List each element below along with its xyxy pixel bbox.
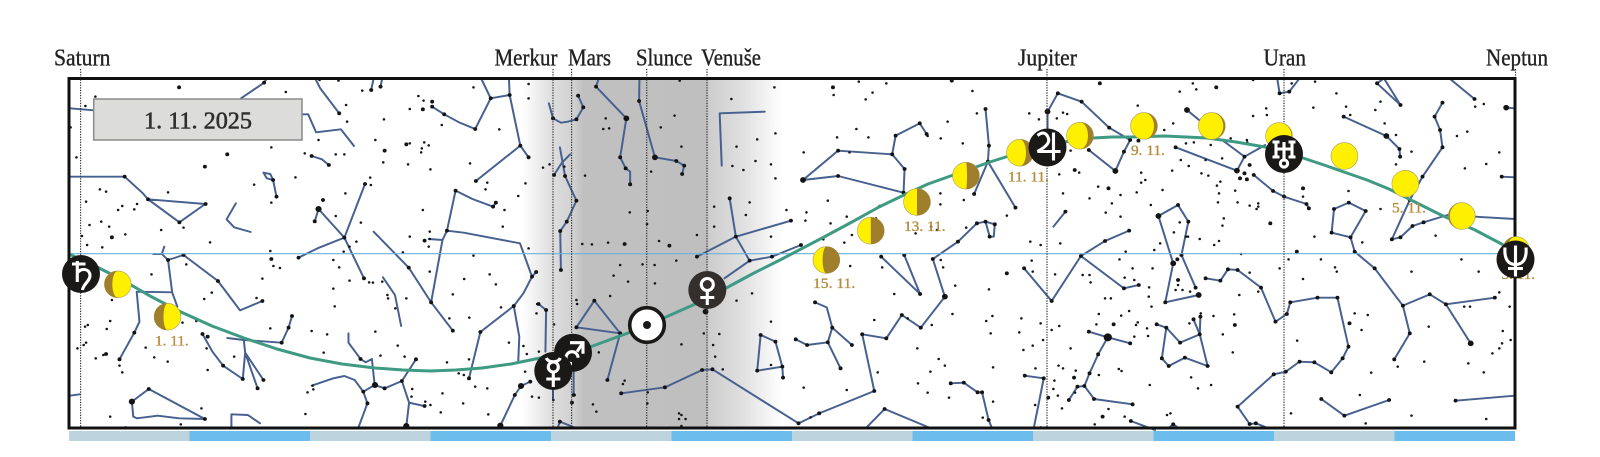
constellations: central section — [539, 78, 1015, 428]
moon date labels: 1. 11. — [155, 334, 189, 350]
stars: central small — [543, 81, 1007, 428]
planet: Jupiter — [1028, 128, 1066, 166]
moon: 2 Nov — [104, 271, 131, 298]
moon: 11 Nov — [1007, 139, 1033, 166]
planet name labels: Merkur — [494, 46, 558, 72]
planet name labels: Slunce — [636, 46, 692, 72]
stars: east medium — [1024, 83, 1506, 424]
stars: east small — [1019, 80, 1511, 427]
moon: 15 Nov — [813, 247, 840, 273]
moon date labels: 9. 11. — [1131, 143, 1165, 159]
planet: Saturn — [62, 255, 100, 293]
moon phases along ecliptic — [104, 113, 1529, 330]
moon: 9 Nov — [1131, 113, 1157, 139]
chart frame — [69, 78, 1515, 428]
moon: 7 Nov — [1266, 123, 1292, 149]
moon: 1 Nov — [154, 303, 181, 330]
planet position dotted guides — [81, 69, 1516, 428]
moon: 10 Nov — [1067, 122, 1093, 149]
moon date labels: 11. 11. — [1008, 170, 1049, 186]
moon date labels: 3. 11. — [1502, 267, 1535, 283]
planet name labels: Neptun — [1486, 46, 1548, 72]
planet name labels: Uran — [1264, 46, 1306, 72]
planet name labels — [54, 46, 1548, 72]
moon: 4 Nov — [1448, 203, 1475, 229]
star field and constellations — [70, 78, 1515, 430]
constellations: east section — [1019, 78, 1515, 430]
stars: east large — [1048, 108, 1506, 343]
moon: 6 Nov — [1331, 143, 1358, 169]
stars: west small — [71, 80, 539, 427]
moon date labels — [155, 143, 1535, 350]
moon: 12 Nov — [953, 162, 979, 189]
planet: Uranus — [1265, 135, 1303, 173]
planet name labels: Saturn — [54, 46, 110, 72]
moon date labels: 13. 11. — [904, 219, 946, 235]
stars: central large — [626, 118, 945, 312]
moon: 8 Nov — [1198, 113, 1225, 139]
stars: west large — [132, 209, 521, 426]
planet: Mercury — [534, 352, 572, 390]
bottom month strip — [69, 431, 1515, 441]
moon: 13 Nov — [904, 189, 930, 215]
constellations: west section — [70, 78, 539, 428]
moon: 3 Nov — [1503, 237, 1529, 263]
moon: 5 Nov — [1392, 170, 1419, 197]
date box — [94, 99, 302, 140]
moon date labels: 15. 11. — [813, 276, 855, 292]
stars: west medium — [106, 83, 536, 419]
ecliptic curve — [69, 136, 1513, 371]
moon: 14 Nov — [857, 217, 884, 244]
planet: Venus — [688, 271, 726, 309]
planet name labels: Venuše — [701, 46, 761, 72]
planet: Neptune — [1496, 240, 1534, 278]
planet name labels: Mars — [568, 46, 611, 72]
planets — [62, 128, 1534, 390]
planet: Sun — [630, 308, 664, 342]
panel: sun glow band — [522, 78, 782, 428]
stars: central medium — [539, 81, 1015, 423]
moon date labels: 5. 11. — [1392, 201, 1426, 217]
horizon line — [69, 253, 1515, 255]
date box: 1. 11. 2025 — [144, 108, 252, 134]
planet name labels: Jupiter — [1018, 46, 1077, 72]
planet: Mars — [554, 334, 592, 372]
star: bright giant — [1096, 325, 1120, 349]
